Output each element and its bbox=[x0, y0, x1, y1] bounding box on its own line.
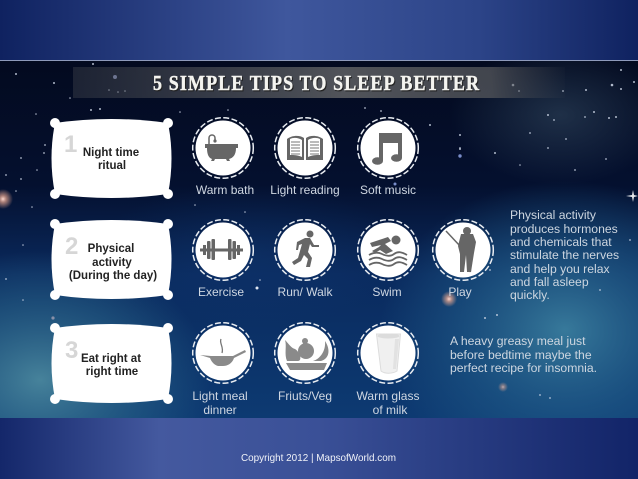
pillow text: eat right: Eat right at bbox=[81, 353, 141, 365]
label: dinner line: dinner bbox=[203, 403, 237, 417]
text block: physical activity note: and chemicals that bbox=[510, 235, 612, 249]
pillow text: physical activity: activity bbox=[92, 257, 132, 269]
sparkle stars bbox=[0, 189, 638, 392]
number 2: 2 bbox=[65, 233, 78, 260]
label: exercise: Exercise bbox=[198, 285, 244, 299]
number 3: 3 bbox=[65, 337, 78, 364]
icon: glass of milk bbox=[358, 323, 418, 383]
copyright footer: Copyright 2012 | MapsofWorld.com bbox=[241, 452, 396, 464]
pillow text: physical activity: (During the day) bbox=[69, 270, 157, 282]
text block: physical activity note: and help you relax bbox=[510, 262, 610, 276]
star field bbox=[5, 63, 635, 399]
icon: swim bbox=[358, 220, 418, 280]
night sky background panel bbox=[0, 60, 638, 418]
label: run walk: Run/ Walk bbox=[278, 285, 333, 299]
text block: greasy meal note: A heavy greasy meal just bbox=[450, 334, 586, 348]
label: of milk line: of milk bbox=[373, 403, 408, 417]
icon: soft music bbox=[358, 118, 418, 178]
panel: tip 2 pillow bbox=[50, 219, 173, 300]
pillow text: eat right: right time bbox=[86, 366, 138, 378]
icon: light reading bbox=[275, 118, 335, 178]
footer band bbox=[0, 418, 638, 479]
icon: exercise bbox=[193, 220, 253, 280]
label: light meal dinner: Light meal bbox=[192, 389, 248, 403]
icon: play bbox=[433, 220, 493, 280]
title bar bbox=[73, 67, 565, 98]
label: light reading: Light reading bbox=[270, 183, 340, 197]
label: fruits veg: Friuts/Veg bbox=[278, 389, 332, 403]
panel: tip 1 pillow bbox=[50, 118, 173, 199]
label: warm glass of milk: Warm glass bbox=[357, 389, 419, 403]
top header band bbox=[0, 0, 638, 60]
text block: greasy meal note: before bedtime maybe the bbox=[450, 348, 592, 362]
panel: tip 3 pillow bbox=[50, 323, 173, 404]
pillow text: night time ritual: ritual bbox=[98, 160, 126, 172]
number 1: 1 bbox=[64, 131, 77, 158]
label: warm bath: Warm bath bbox=[196, 183, 254, 197]
text block: physical activity note: quickly. bbox=[510, 288, 550, 302]
label: play: Play bbox=[448, 285, 472, 299]
pillow text: physical activity: Physical bbox=[88, 243, 134, 255]
icon: light meal bbox=[193, 323, 253, 383]
icon: fruits / veg bbox=[275, 323, 335, 383]
label: swim: Swim bbox=[372, 285, 402, 299]
text block: physical activity note: Physical activity bbox=[510, 208, 597, 222]
icon: warm bath bbox=[193, 118, 253, 178]
text block: physical activity note: stimulate the nerves bbox=[510, 248, 619, 262]
title: 5 SIMPLE TIPS TO SLEEP BETTER bbox=[153, 73, 480, 95]
text block: greasy meal note: perfect recipe for insomnia. bbox=[450, 361, 597, 375]
pillow text: night time ritual: Night time bbox=[83, 147, 139, 159]
text block: physical activity note: produces hormones bbox=[510, 222, 618, 236]
label: soft music: Soft music bbox=[360, 183, 416, 197]
icon: run / walk bbox=[275, 220, 335, 280]
text block: physical activity note: and fall asleep bbox=[510, 275, 589, 289]
